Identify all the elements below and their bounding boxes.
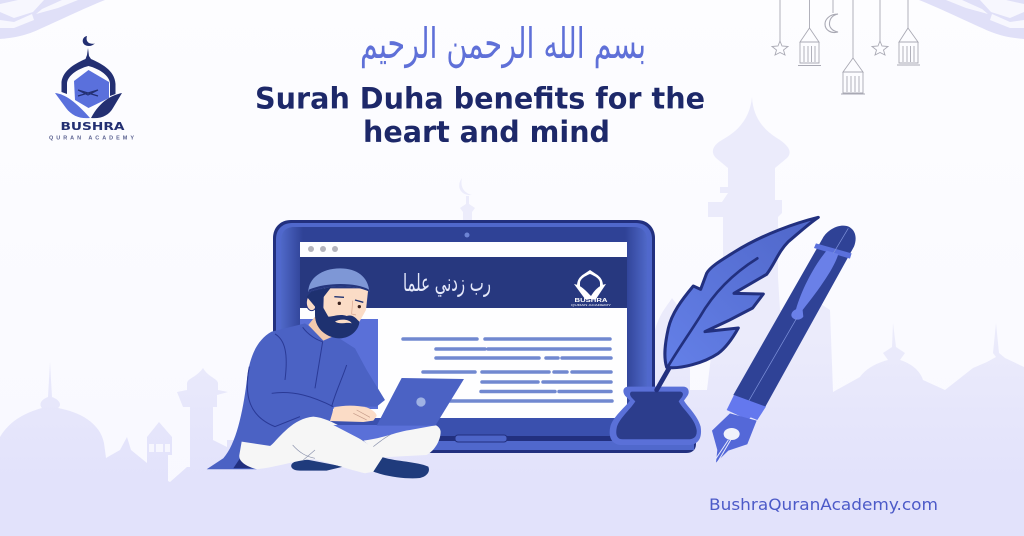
quill feather — [657, 217, 818, 390]
hanging lanterns and stars — [772, 0, 920, 94]
pen grip — [727, 395, 766, 420]
icon: star left — [772, 41, 788, 55]
icon: lantern 2 — [841, 58, 865, 94]
man: hair and beard — [307, 287, 359, 338]
laptop: large screen — [273, 220, 696, 453]
blue panel on screen — [300, 319, 378, 409]
icon: lantern 1 — [798, 28, 821, 66]
feather stem — [657, 367, 670, 390]
pen centre line — [748, 228, 848, 402]
title — [255, 82, 705, 149]
man: trousers — [239, 417, 385, 473]
background: small cupola openings — [149, 444, 170, 452]
man with laptop — [207, 268, 464, 478]
icon: logo crescent — [83, 36, 95, 46]
pen band — [814, 243, 852, 259]
man: far foot — [291, 458, 343, 471]
nib hole — [724, 428, 740, 440]
decoration: top-right corner swoosh — [919, 0, 1024, 39]
icon: logo left hand — [55, 93, 90, 118]
logo: Bushra Quran Academy — [49, 36, 134, 142]
man: kurta — [207, 323, 385, 469]
man: hand — [330, 406, 377, 422]
fountain pen — [712, 226, 856, 463]
screen — [300, 242, 627, 418]
icon: lantern 3 — [897, 28, 920, 65]
small laptop base — [333, 425, 437, 441]
man: face — [323, 288, 368, 327]
title: Surah Duha benefits for the — [255, 82, 705, 116]
decoration: top-left corner swoosh — [0, 0, 105, 39]
laptop frame — [273, 220, 655, 440]
banner logo: BUSHRA — [574, 298, 608, 304]
banner logo — [571, 260, 611, 307]
feather spine — [668, 258, 757, 366]
title: heart and mind — [363, 115, 610, 149]
icon: logo arch — [62, 48, 116, 96]
banner calligraphy: رب زدني علما — [403, 269, 491, 297]
pen clip — [791, 251, 838, 320]
banner logo: QURAN ACADEMY — [571, 303, 611, 307]
man: kurta fold lines — [247, 327, 347, 427]
website url: BushraQuranAcademy.com — [709, 495, 938, 514]
pen barrel — [733, 226, 856, 407]
man: eyes — [338, 302, 341, 305]
camera — [464, 232, 470, 238]
background: small dome behind inkwell — [655, 298, 690, 400]
icon: crescent — [825, 14, 838, 33]
man: neck — [308, 317, 340, 341]
icon: star right — [872, 41, 888, 55]
logo subtitle: QURAN ACADEMY — [49, 136, 134, 142]
icon: logo open book — [78, 90, 98, 96]
icon: logo right hand — [91, 93, 122, 118]
background: left mosque skyline — [0, 362, 640, 536]
man: cap — [308, 268, 369, 292]
icon: logo hexagon — [74, 70, 109, 108]
feather vane — [665, 217, 818, 368]
small laptop lid — [377, 378, 464, 426]
logo name: BUSHRA — [60, 120, 125, 133]
background: right minaret and skyline — [640, 97, 1024, 536]
calligraphy: Bismillah: بسم الله الرحمن الرحيم — [360, 19, 646, 69]
background: ground band — [227, 440, 640, 536]
laptop trackpad notch — [455, 435, 507, 442]
text lines — [403, 339, 612, 401]
man: near foot — [373, 457, 429, 478]
background: small crescent spire above laptop — [459, 178, 475, 220]
ink bottle — [610, 387, 701, 445]
pen nib — [712, 413, 757, 463]
man: ear — [306, 295, 317, 311]
browser dots — [308, 246, 338, 252]
screen banner — [300, 257, 627, 308]
laptop base — [300, 436, 696, 453]
